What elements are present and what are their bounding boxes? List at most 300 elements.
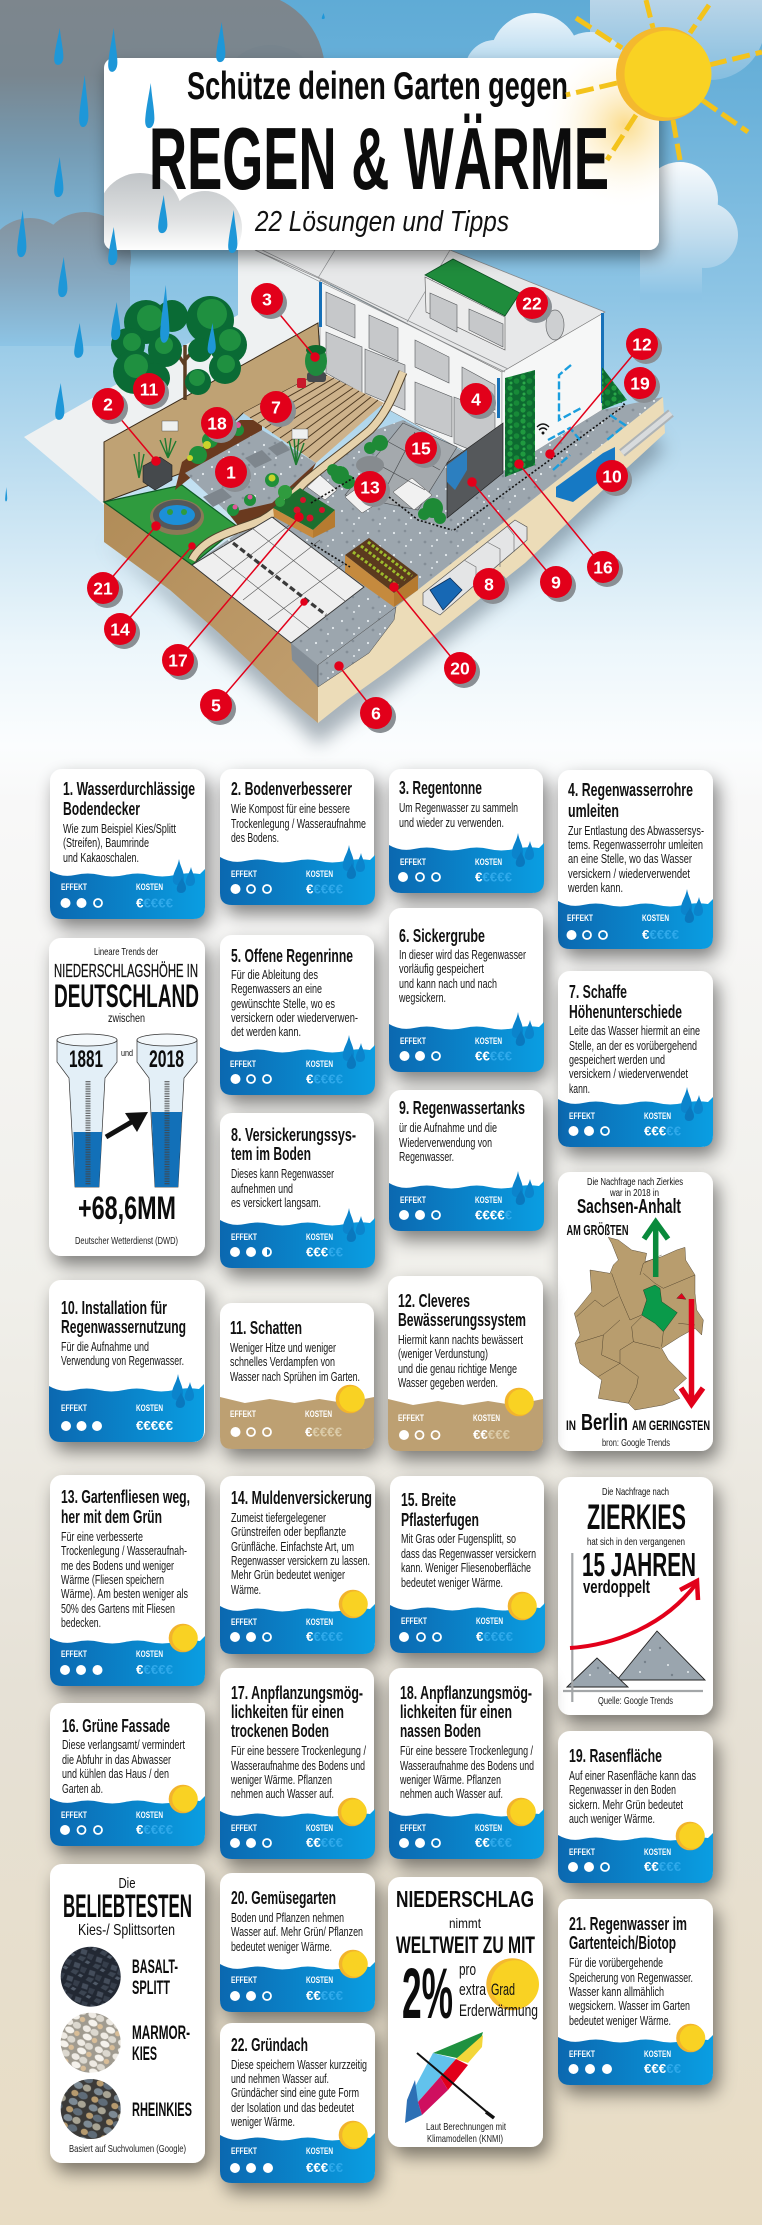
marker 4: 4 bbox=[471, 390, 481, 410]
panel: card 2 bbox=[220, 769, 375, 905]
text: Wasseraufnahme des Bodens und bbox=[231, 1759, 365, 1773]
heading: WELTWEIT ZU MIT bbox=[396, 1932, 535, 1959]
text: Diese verlangsamt/ vermindert bbox=[62, 1738, 185, 1752]
heading: her mit dem Grün bbox=[61, 1506, 162, 1527]
text: Wärme). Am besten weniger als bbox=[61, 1587, 188, 1601]
item: Marmorkies bbox=[61, 2013, 190, 2073]
text bbox=[401, 1532, 536, 1590]
footer bbox=[220, 1798, 375, 1859]
text: und nehmen Wasser auf. bbox=[231, 2072, 329, 2086]
text: schnelles Verdampfen von bbox=[230, 1355, 335, 1369]
heading: 12. Cleveres bbox=[398, 1290, 470, 1311]
icon: wifi bbox=[537, 424, 549, 434]
text: Mehr Grün bedeutet weniger bbox=[231, 1568, 345, 1582]
heading: 20. Gemüsegarten bbox=[231, 1887, 336, 1908]
text: Trockenlegung / Wasseraufnahme bbox=[231, 817, 366, 831]
footer: EFFEKT bbox=[231, 1232, 257, 1242]
heading bbox=[231, 1682, 363, 1741]
heading: trockenen Boden bbox=[231, 1720, 329, 1741]
deck bbox=[243, 372, 384, 463]
heading: verdoppelt bbox=[583, 1577, 650, 1597]
text: Dieses kann Regenwasser bbox=[231, 1167, 334, 1181]
icon: sun bbox=[566, 0, 762, 160]
heading: Die bbox=[118, 1875, 136, 1892]
footer: EFFEKT bbox=[231, 1975, 257, 1985]
footer: EFFEKT bbox=[61, 1403, 87, 1413]
text: gespeichert werden und bbox=[569, 1053, 665, 1067]
footer bbox=[389, 1798, 544, 1859]
heading bbox=[396, 1886, 538, 2034]
panel: most popular gravel bbox=[50, 1864, 205, 2163]
footer: KOSTEN bbox=[305, 1409, 332, 1419]
panel: card 15 bbox=[390, 1476, 545, 1653]
text bbox=[230, 2058, 367, 2129]
text: Zur Entlastung des Abwassersys- bbox=[568, 824, 704, 838]
source: Klimamodellen (KNMI) bbox=[427, 2133, 503, 2145]
marker 22: 22 bbox=[522, 294, 542, 314]
heading: NIEDERSCHLAG bbox=[396, 1886, 534, 1912]
heading: 5. Offene Regenrinne bbox=[231, 945, 353, 966]
footer bbox=[389, 833, 544, 893]
title line 1: Schütze deinen Garten gegen bbox=[187, 65, 568, 108]
back wall bbox=[104, 323, 321, 502]
illustration: house and garden bbox=[24, 250, 671, 745]
text: Wasser nach Sprühen im Garten. bbox=[230, 1370, 360, 1384]
heading bbox=[398, 1290, 526, 1330]
text: 50% des Gartens mit Fliesen bbox=[61, 1602, 175, 1616]
footer: EFFEKT bbox=[231, 869, 257, 879]
marker 10: 10 bbox=[602, 466, 622, 486]
footer: KOSTEN bbox=[644, 1111, 671, 1121]
heading: Die Nachfrage nach bbox=[602, 1486, 669, 1498]
footer bbox=[220, 1035, 375, 1095]
text bbox=[63, 822, 176, 865]
marker 7: 7 bbox=[271, 398, 281, 418]
footer: €€€€€ bbox=[136, 1663, 173, 1677]
footer: EFFEKT bbox=[569, 1847, 595, 1857]
heading: 17. Anpflanzungsmög- bbox=[231, 1682, 363, 1703]
heading bbox=[400, 1682, 532, 1741]
marker 14 bbox=[104, 613, 140, 649]
text: Für die Aufnahme und bbox=[61, 1340, 149, 1354]
text: Regenwassers an eine bbox=[231, 982, 322, 996]
text bbox=[231, 1511, 370, 1597]
footer: €€€€€ bbox=[306, 882, 343, 896]
panel: card 21 bbox=[558, 1899, 713, 2085]
text bbox=[230, 1744, 366, 1801]
footer: €€€€€ bbox=[306, 1072, 343, 1086]
heading: nimmt bbox=[449, 1915, 481, 1931]
heading: tem im Boden bbox=[231, 1143, 311, 1164]
pond bbox=[150, 499, 204, 535]
text bbox=[62, 1738, 185, 1796]
heading bbox=[63, 1875, 192, 1939]
panel: rainfall in Germany bbox=[49, 938, 205, 1256]
footer: EFFEKT bbox=[231, 2146, 257, 2156]
heading bbox=[401, 1489, 479, 1530]
footer: €€€€€ bbox=[644, 1124, 681, 1138]
source: Quelle: Google Trends bbox=[598, 1695, 673, 1707]
footer: KOSTEN bbox=[306, 2146, 333, 2156]
back ground plane bbox=[24, 250, 330, 505]
heading: umleiten bbox=[568, 800, 619, 821]
text: und die genau richtige Menge bbox=[398, 1362, 517, 1376]
heading: Grad bbox=[491, 1980, 515, 1999]
text: nehmen auch Wasser auf. bbox=[400, 1787, 503, 1801]
text: dass das Regenwasser versickern bbox=[401, 1547, 536, 1561]
heading: 10. Installation für bbox=[61, 1297, 167, 1318]
clouds: lower left cloud bbox=[0, 212, 131, 346]
text: ür die Aufnahme und die bbox=[399, 1121, 497, 1135]
label: und: und bbox=[121, 1048, 133, 1059]
marker 9 bbox=[540, 566, 576, 602]
footer: EFFEKT bbox=[231, 1823, 257, 1833]
heading: Sachsen-Anhalt bbox=[577, 1196, 681, 1218]
text: sickern. Mehr Grün bedeutet bbox=[569, 1798, 683, 1812]
marker 11 bbox=[133, 373, 169, 409]
heading: Gartenteich/Biotop bbox=[569, 1932, 676, 1953]
marker 16: 16 bbox=[593, 558, 613, 578]
footer: KOSTEN bbox=[644, 2049, 671, 2059]
title panel bbox=[97, 56, 672, 268]
marker 14: 14 bbox=[110, 620, 130, 640]
text: Wie Kompost für eine bessere bbox=[231, 802, 350, 816]
footer bbox=[220, 1590, 375, 1654]
text: Stelle, an der es vorübergehend bbox=[569, 1039, 697, 1053]
heading: war in 2018 in bbox=[609, 1187, 659, 1199]
footer: KOSTEN bbox=[475, 1195, 502, 1205]
text bbox=[231, 1167, 334, 1210]
footer: KOSTEN bbox=[475, 1823, 502, 1833]
footer: EFFEKT bbox=[400, 1823, 426, 1833]
text: Hiermit kann nachts bewässert bbox=[398, 1333, 523, 1347]
text: Wiederverwendung von bbox=[399, 1136, 492, 1150]
heading: Bodendecker bbox=[63, 798, 140, 819]
footer: KOSTEN bbox=[306, 1617, 333, 1627]
text: aufnehmen und bbox=[231, 1182, 293, 1196]
text: kann. bbox=[569, 1082, 590, 1096]
soil block faces bbox=[104, 500, 318, 723]
heading: 19. Rasenfläche bbox=[569, 1745, 662, 1766]
marker 15 bbox=[405, 432, 441, 468]
footer bbox=[388, 1388, 543, 1451]
footer: €€€€€ bbox=[306, 1836, 343, 1850]
text: Grünstreifen oder bepflanzte bbox=[231, 1525, 346, 1539]
panel: card 5 bbox=[220, 935, 375, 1095]
marker 21: 21 bbox=[93, 578, 113, 598]
footer: €€€€€ bbox=[306, 2161, 343, 2175]
marker 1 bbox=[215, 456, 251, 492]
heading: hat sich in den vergangenen bbox=[587, 1536, 685, 1548]
text: versickern oder wiederverwen- bbox=[231, 1011, 358, 1025]
panel: card 14 bbox=[220, 1476, 375, 1654]
text bbox=[61, 1530, 188, 1630]
marker 15: 15 bbox=[411, 438, 431, 458]
text: (weniger Verdunstung) bbox=[398, 1347, 488, 1361]
footer: €€€€€ bbox=[306, 1246, 343, 1260]
marker 7 bbox=[260, 391, 296, 427]
text: vorläufig gespeichert bbox=[399, 962, 484, 976]
marker 8: 8 bbox=[484, 574, 494, 594]
footer: EFFEKT bbox=[230, 1409, 256, 1419]
item: Marmorkies: MARMOR- bbox=[132, 2023, 190, 2044]
heading bbox=[569, 1913, 687, 1953]
marker 13 bbox=[354, 471, 390, 507]
footer bbox=[558, 889, 713, 949]
text: gewünschte Stelle, wo es bbox=[231, 997, 335, 1011]
text bbox=[231, 968, 358, 1039]
text: Wärme (Fliesen speichern bbox=[61, 1573, 164, 1587]
footer: KOSTEN bbox=[306, 1823, 333, 1833]
footer bbox=[50, 1624, 205, 1686]
footer: €€€€€ bbox=[136, 1419, 173, 1433]
text: Für eine verbesserte bbox=[61, 1530, 143, 1544]
leader lines bbox=[103, 299, 642, 713]
text: versickern / wiederverwendet bbox=[568, 867, 690, 881]
marker 11: 11 bbox=[140, 380, 159, 400]
marker 16 bbox=[587, 551, 623, 587]
marker 12 bbox=[626, 328, 662, 364]
footer: €€€€€ bbox=[644, 2062, 681, 2076]
front gravel faces bbox=[291, 643, 318, 687]
footer: €€€€€ bbox=[475, 1208, 512, 1222]
blue tank bbox=[556, 413, 671, 502]
flower bed bbox=[273, 485, 335, 538]
heading bbox=[231, 1124, 356, 1164]
heading: 9. Regenwassertanks bbox=[399, 1097, 525, 1118]
chart: right rain gauge 2018 bbox=[137, 1034, 197, 1187]
arrow: red down bbox=[681, 1299, 703, 1404]
panel: card 20 bbox=[220, 1873, 375, 2012]
main gravel bbox=[192, 397, 663, 665]
footer: KOSTEN bbox=[136, 1649, 163, 1659]
text: Verwendung von Regenwasser. bbox=[61, 1354, 184, 1368]
caption: Berlin: IN bbox=[566, 1417, 576, 1433]
footer: €€€€€ bbox=[475, 870, 512, 884]
marker 22 bbox=[516, 287, 552, 323]
grey planters bbox=[356, 456, 384, 474]
marker 18 bbox=[201, 407, 237, 443]
crates bbox=[423, 520, 527, 615]
text: und kann nach und nach bbox=[399, 977, 497, 991]
heading: zwischen bbox=[108, 1013, 145, 1025]
text: Trockenlegung / Wasseraufnah- bbox=[61, 1544, 187, 1558]
footer: KOSTEN bbox=[306, 869, 333, 879]
shrubs bbox=[327, 435, 446, 524]
text bbox=[568, 1956, 693, 2028]
heading: Pflasterfugen bbox=[401, 1509, 479, 1530]
marker 18: 18 bbox=[207, 414, 227, 434]
icon: umbrella bbox=[405, 2032, 494, 2123]
heading: Lineare Trends der bbox=[94, 946, 158, 958]
text: des Bodens. bbox=[231, 831, 279, 845]
footer: KOSTEN bbox=[475, 1036, 502, 1046]
footer: KOSTEN bbox=[473, 1413, 500, 1423]
source: Laut Berechnungen mit bbox=[426, 2121, 506, 2133]
text bbox=[398, 1333, 523, 1390]
text: und kühlen das Haus / den bbox=[62, 1767, 169, 1781]
text: Leite das Wasser hiermit an eine bbox=[569, 1024, 700, 1038]
marker 10 bbox=[596, 460, 632, 496]
heading: 2% bbox=[402, 1955, 453, 2034]
text: wegsickern. Wasser im Garten bbox=[568, 1999, 690, 2013]
text: Wasser auf. Mehr Grün/ Pflanzen bbox=[231, 1925, 363, 1939]
heading: DEUTSCHLAND bbox=[54, 978, 199, 1014]
marker 6: 6 bbox=[371, 704, 381, 724]
marker 2: 2 bbox=[103, 394, 113, 414]
house bbox=[255, 250, 605, 472]
footer: EFFEKT bbox=[400, 1036, 426, 1046]
clouds: white right clouds bbox=[465, 0, 762, 300]
text: es versickert langsam. bbox=[231, 1196, 321, 1210]
arrow bbox=[106, 1112, 148, 1137]
panel: card 7 bbox=[558, 971, 713, 1147]
clouds: dark rain cloud bbox=[0, 0, 325, 250]
text: (Streifen), Baumrinde bbox=[63, 836, 149, 850]
footer: KOSTEN bbox=[475, 857, 502, 867]
footer: €€€€€ bbox=[476, 1630, 513, 1644]
text bbox=[399, 801, 518, 830]
text bbox=[569, 1769, 696, 1826]
text: Regenwasser versickern zu lassen. bbox=[231, 1554, 370, 1568]
heading: ZIERKIES bbox=[587, 1498, 686, 1537]
footer bbox=[389, 1171, 544, 1231]
footer bbox=[220, 1950, 375, 2012]
text bbox=[398, 948, 526, 1005]
heading: 21. Regenwasser im bbox=[569, 1913, 687, 1934]
lawn bbox=[104, 485, 238, 565]
text: bedeutet weniger Wärme. bbox=[569, 2014, 671, 2028]
text: wegsickern. bbox=[398, 991, 446, 1005]
text: Wasser kann allmählich bbox=[569, 1985, 664, 1999]
footer bbox=[389, 1012, 544, 1072]
text: Diese speichern Wasser kurzzeitig bbox=[231, 2058, 367, 2072]
heading bbox=[63, 778, 195, 819]
text: versickern / wiederverwendet bbox=[569, 1067, 688, 1081]
text: auch weniger Wärme. bbox=[569, 1812, 655, 1826]
heading: 13. Gartenfliesen weg, bbox=[61, 1486, 190, 1507]
text: Für eine bessere Trockenlegung / bbox=[400, 1744, 533, 1758]
marker 2 bbox=[92, 388, 128, 424]
concrete tiles bbox=[192, 517, 364, 643]
tree bbox=[111, 296, 247, 400]
text: Für eine bessere Trockenlegung / bbox=[231, 1744, 366, 1758]
arrow: green up bbox=[644, 1222, 668, 1277]
footer: EFFEKT bbox=[400, 857, 426, 867]
panel: card 8 bbox=[220, 1113, 375, 1268]
heading bbox=[568, 779, 693, 821]
marker 3: 3 bbox=[262, 290, 272, 310]
footer: EFFEKT bbox=[569, 2049, 595, 2059]
heading: Erderwärmung bbox=[459, 2001, 538, 2020]
marker 20: 20 bbox=[450, 658, 470, 678]
chart: gravel piles and trend arrow bbox=[563, 1553, 705, 1702]
footer: EFFEKT bbox=[230, 1059, 256, 1069]
vegetable bed bbox=[345, 538, 418, 607]
item: Rheinkies bbox=[61, 2079, 192, 2139]
heading: 3. Regentonne bbox=[399, 777, 482, 798]
footer: €€€€€ bbox=[306, 1630, 343, 1644]
panel: card 1 bbox=[50, 769, 205, 919]
footer: EFFEKT bbox=[61, 1810, 87, 1820]
heading: 6. Sickergrube bbox=[399, 925, 485, 946]
footer: KOSTEN bbox=[306, 1232, 333, 1242]
chart: right rain gauge 2018: 2018 bbox=[149, 1046, 184, 1073]
item: Basaltsplitt bbox=[61, 1947, 178, 2007]
text: me des Bodens und weniger bbox=[61, 1559, 174, 1573]
heading: AM GRÖßTEN bbox=[566, 1222, 628, 1239]
panel: card 18 bbox=[389, 1668, 544, 1859]
footer: KOSTEN bbox=[136, 882, 163, 892]
panel: card 19 bbox=[558, 1731, 713, 1883]
text: Regenwasser in den Boden bbox=[569, 1783, 676, 1797]
text: In dieser wird das Regenwasser bbox=[399, 948, 526, 962]
text bbox=[569, 1024, 700, 1096]
text: der Isolation und das bedeutet bbox=[231, 2101, 354, 2115]
heading: extra bbox=[459, 1980, 486, 1999]
footer: €€€€€ bbox=[136, 896, 173, 910]
marker 19 bbox=[624, 367, 660, 403]
heading: Kies-/ Splittsorten bbox=[78, 1922, 175, 1939]
footer: EFFEKT bbox=[61, 882, 87, 892]
footer bbox=[390, 1592, 545, 1653]
footer bbox=[220, 1208, 375, 1268]
heading bbox=[569, 981, 682, 1022]
panel: card 22 bbox=[220, 2023, 375, 2183]
panel: card 12 bbox=[388, 1276, 543, 1451]
text: Wasseraufnahme des Bodens und bbox=[400, 1759, 534, 1773]
item: Marmorkies: KIES bbox=[132, 2044, 157, 2065]
footer bbox=[558, 1087, 713, 1147]
text bbox=[399, 1744, 534, 1801]
text: Zumeist tiefergelegener bbox=[231, 1511, 326, 1525]
text: Grünfläche. Einfachste Art, um bbox=[231, 1540, 354, 1554]
text: Boden und Pflanzen nehmen bbox=[231, 1911, 344, 1925]
heading: 15 JAHREN bbox=[582, 1546, 696, 1583]
panel: card 10 bbox=[49, 1280, 205, 1442]
text: det werden kann. bbox=[231, 1025, 301, 1039]
heading: BELIEBTESTEN bbox=[63, 1888, 192, 1924]
marker 5: 5 bbox=[211, 696, 221, 716]
item: Basaltsplitt: SPLITT bbox=[132, 1978, 170, 1999]
text: Auf einer Rasenfläche kann das bbox=[569, 1769, 696, 1783]
heading: 15. Breite bbox=[401, 1489, 456, 1510]
source: Basiert auf Suchvolumen (Google) bbox=[69, 2143, 186, 2155]
text: Weniger Hitze und weniger bbox=[230, 1341, 336, 1355]
footer: €€€€€ bbox=[473, 1428, 510, 1442]
marker 8 bbox=[473, 568, 509, 604]
footer: EFFEKT bbox=[567, 913, 593, 923]
text: und Kakaoschalen. bbox=[63, 851, 139, 865]
grey bin bbox=[143, 457, 172, 490]
marker 1: 1 bbox=[226, 462, 236, 482]
footer bbox=[50, 1785, 205, 1846]
text: weniger Wärme. Pflanzen bbox=[230, 1773, 332, 1787]
marker 9: 9 bbox=[551, 572, 561, 592]
panel: card 9 bbox=[389, 1090, 544, 1231]
panel: card 13 bbox=[50, 1475, 205, 1686]
heading: 11. Schatten bbox=[230, 1317, 302, 1338]
footer: EFFEKT bbox=[400, 1195, 426, 1205]
text: weniger Wärme. bbox=[230, 2115, 295, 2129]
figure: +68,6MM bbox=[78, 1190, 176, 1226]
text: die Abfuhr in das Abwasser bbox=[62, 1753, 171, 1767]
text: bedecken. bbox=[61, 1616, 101, 1630]
text: Wie zum Beispiel Kies/Splitt bbox=[63, 822, 176, 836]
source bbox=[426, 2121, 506, 2145]
text: bedeutet weniger Wärme. bbox=[401, 1576, 503, 1590]
soil beds bbox=[175, 420, 262, 490]
